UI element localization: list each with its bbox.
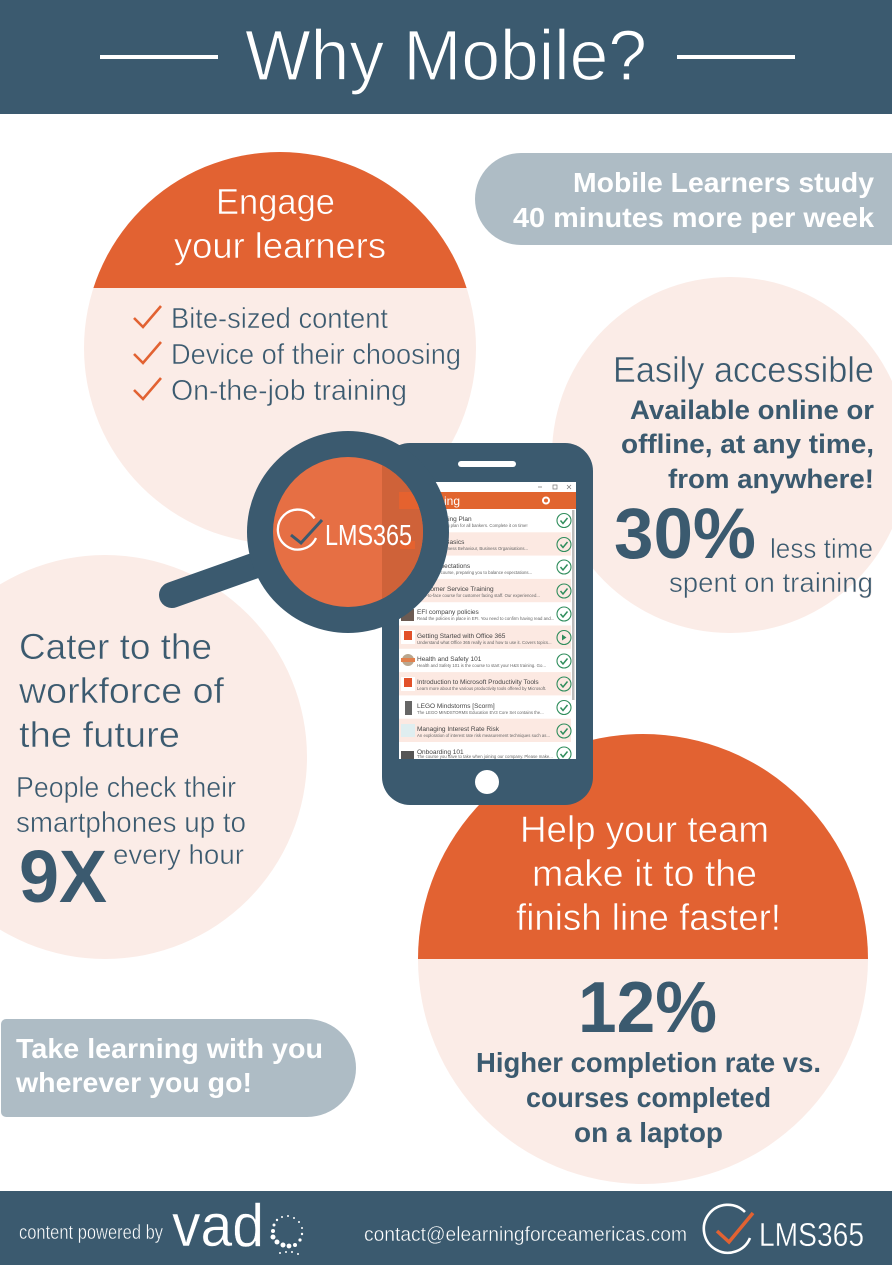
callout: mobile learners study more: Mobile Learners study bbox=[573, 167, 874, 198]
panel: easily accessible bbox=[552, 277, 892, 633]
callout: mobile learners study more bbox=[475, 153, 892, 245]
panel: finish line faster: finish line faster! bbox=[516, 897, 781, 938]
panel: workforce of the future: smartphones up to bbox=[16, 807, 246, 839]
logo: LMS365 bbox=[704, 1205, 864, 1253]
course list rows: Read the policies in place in EFI. You need to confirm having read and... bbox=[417, 616, 554, 621]
phone screen: My Training bbox=[398, 494, 460, 508]
checklist: Bite-sized content bbox=[171, 303, 388, 335]
course list rows: Business Basics bbox=[417, 539, 465, 546]
phone screen bbox=[398, 482, 576, 761]
panel: finish line faster: make it to the bbox=[532, 853, 757, 894]
contact email: contact@elearningforceamericas.com bbox=[364, 1224, 687, 1246]
course list rows: Health and Safety 101 is the course to start your H&S training. Go... bbox=[417, 663, 546, 668]
logo: LMS365: LMS365 bbox=[759, 1216, 864, 1253]
phone bbox=[382, 443, 593, 805]
course list rows: An exploration of interest rate risk measurement techniques such as... bbox=[417, 733, 550, 738]
course list rows: Customer Service Training bbox=[417, 586, 494, 593]
course list rows: The course you have to take when joining our company. Please make... bbox=[417, 754, 553, 759]
panel: engage your learners: your learners bbox=[174, 225, 386, 266]
course list rows: Scholarship course, preparing you to balance expectations... bbox=[417, 570, 532, 575]
panel: engage your learners bbox=[84, 152, 476, 544]
course list rows: EFI company policies bbox=[417, 609, 480, 616]
course list rows: The LEGO MINDSTORMS Education EV3 Core Set contains the... bbox=[417, 710, 544, 715]
course list rows: Statutory training plan for all bankers. Complete it on time! bbox=[417, 523, 528, 528]
panel: easily accessible: offline, at any time, bbox=[621, 429, 874, 459]
callout: take learning with you: Take learning with you bbox=[16, 1033, 323, 1064]
panel: finish line faster: on a laptop bbox=[574, 1117, 723, 1148]
header banner bbox=[0, 0, 892, 114]
course list rows: Understand what Office 365 really is and how to use it. Covers topics... bbox=[417, 640, 552, 645]
panel: finish line faster: Higher completion rate vs. bbox=[476, 1047, 821, 1078]
panel: easily accessible: from anywhere! bbox=[668, 464, 874, 494]
stat: 30%: 30% bbox=[614, 495, 756, 574]
status check icons bbox=[557, 514, 571, 761]
logo: LMS365 in lens: LMS365 bbox=[325, 520, 412, 552]
callout: take learning with you bbox=[1, 1019, 356, 1117]
course list rows: Onboarding 101 bbox=[417, 749, 464, 756]
course list rows: Bank expectations bbox=[417, 563, 471, 570]
panel: finish line faster: courses completed bbox=[526, 1082, 771, 1113]
footer bbox=[0, 1191, 892, 1265]
panel: finish line faster: Help your team bbox=[520, 809, 769, 850]
panel: workforce of the future: the future bbox=[19, 714, 180, 755]
panel: workforce of the future: every hour bbox=[113, 839, 244, 870]
course list rows: Introduction to Microsoft Productivity Tools bbox=[417, 679, 539, 686]
panel: workforce of the future: Cater to the bbox=[19, 626, 212, 667]
checklist: On-the-job training bbox=[171, 375, 407, 407]
checklist: Device of their choosing bbox=[171, 339, 461, 371]
course list rows: Face-to-face course for customer facing staff. Our experienced... bbox=[417, 593, 540, 598]
stat: 9X: 9X bbox=[19, 835, 107, 918]
thumbnails bbox=[401, 609, 415, 759]
course list rows: Managing Interest Rate Risk bbox=[417, 726, 500, 733]
callout: mobile learners study more: 40 minutes more per week bbox=[513, 202, 874, 233]
panel: easily accessible: Easily accessible bbox=[613, 349, 874, 390]
footer: content powered by bbox=[19, 1222, 163, 1244]
callout: take learning with you: wherever you go! bbox=[15, 1067, 252, 1098]
stat: 12%: 12% bbox=[578, 968, 717, 1048]
panel: workforce of the future: workforce of bbox=[18, 670, 225, 711]
course list rows: Learn more about the various productivity tools offered by Microsoft. bbox=[417, 686, 546, 691]
panel: workforce of the future: People check their bbox=[16, 772, 236, 804]
lens view of phone bbox=[382, 465, 423, 599]
course list rows: Bank Training Plan bbox=[417, 516, 472, 523]
panel: easily accessible: less time bbox=[770, 533, 873, 564]
course list rows: Health and Safety 101 bbox=[417, 656, 482, 663]
logo: vado: vad bbox=[172, 1192, 264, 1259]
course list rows: LEGO Mindstorms [Scorm] bbox=[417, 703, 495, 710]
panel: engage your learners: Engage bbox=[216, 181, 335, 222]
panel: workforce of the future bbox=[0, 555, 307, 959]
panel: easily accessible: Available online or bbox=[630, 395, 874, 425]
course list rows: Getting Started with Office 365 bbox=[417, 633, 506, 640]
course list rows: Training To Business Behaviour, Business Organisations... bbox=[417, 546, 528, 551]
checklist bbox=[134, 303, 461, 407]
panel: easily accessible: spent on training bbox=[669, 567, 873, 598]
magnifying glass bbox=[172, 431, 449, 633]
title: Why Mobile? bbox=[245, 17, 647, 96]
logo: LMS365 in lens bbox=[278, 510, 412, 552]
course list rows bbox=[399, 510, 574, 761]
panel: finish line faster bbox=[418, 734, 868, 1184]
